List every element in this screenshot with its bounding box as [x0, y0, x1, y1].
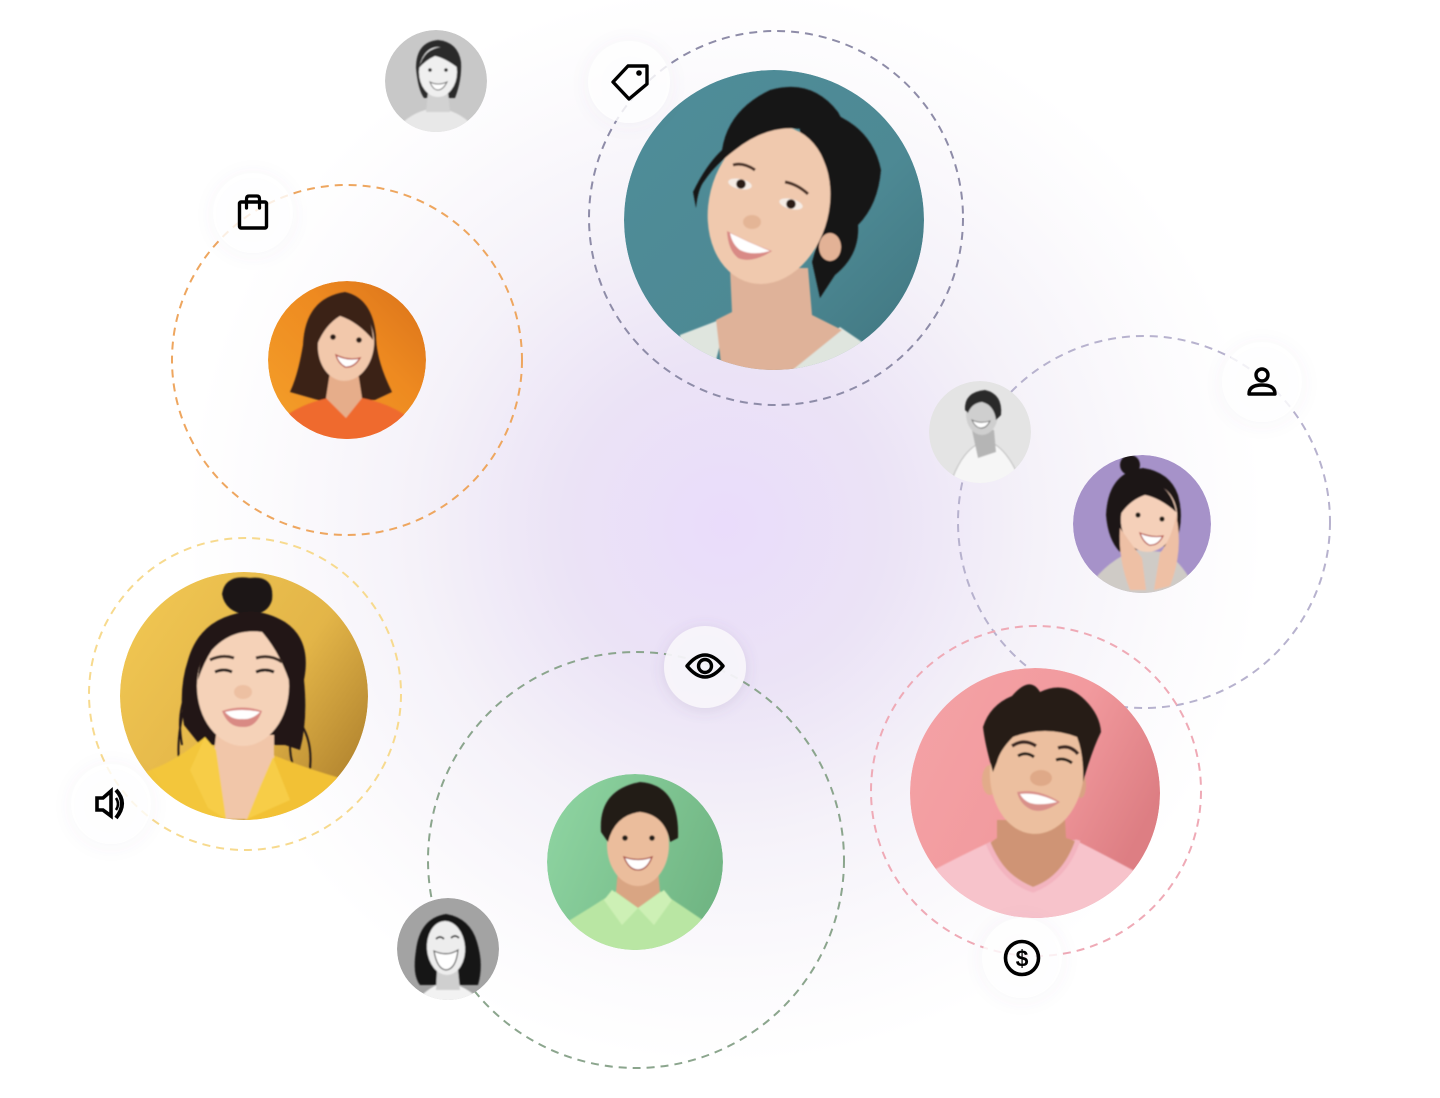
portrait: woman on purple: [1073, 455, 1211, 600]
portrait: grayscale man, right: [929, 381, 1031, 490]
icon: dollar coin: $: [1016, 946, 1029, 972]
portrait: man on green: [547, 774, 723, 955]
dashed ring: teal: [589, 31, 963, 405]
dashed ring: pink: [871, 626, 1201, 956]
icon: shopping bag: [213, 173, 293, 253]
dashed ring: green: [428, 652, 844, 1068]
icon: price tag: [588, 41, 670, 123]
portrait: grayscale woman, bottom: [397, 898, 499, 1002]
icon: dollar coin: [982, 918, 1062, 998]
dashed ring: yellow: [89, 538, 401, 850]
portrait: grayscale woman, top: [385, 30, 487, 135]
portrait: woman on teal: [624, 70, 924, 372]
icon: person: [1222, 342, 1302, 422]
dashed ring: lavender: [958, 336, 1330, 708]
portrait: man on pink: [910, 668, 1160, 925]
dashed ring: orange: [172, 185, 522, 535]
portrait: woman on orange: [268, 281, 426, 445]
icon: speaker: [71, 764, 151, 844]
icon: eye: [664, 626, 746, 708]
portrait: woman on yellow: [120, 572, 368, 830]
